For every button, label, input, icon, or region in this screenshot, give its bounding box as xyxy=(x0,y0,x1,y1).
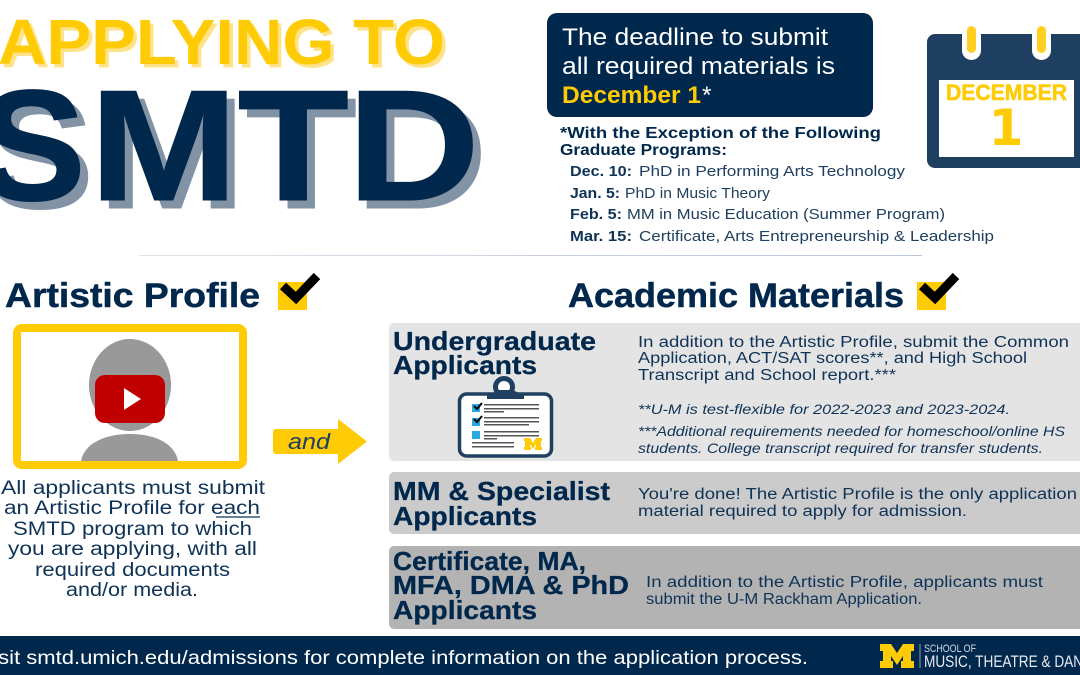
text: undergraduate footnotes: students. College transcript required for transfer students. xyxy=(638,440,1043,456)
panel: certificate, MA, MFA, DMA and PhD applicants xyxy=(389,546,1080,629)
text: MM and specialist requirements xyxy=(638,486,1077,520)
text: MM and specialist requirements: material required to apply for admission. xyxy=(638,503,967,520)
text block: exceptions: Dec. 10: xyxy=(570,163,632,180)
heading: Academic Materials: Academic Materials xyxy=(568,277,904,315)
text block: exceptions: Jan. 5: xyxy=(570,185,620,202)
text block: exceptions: PhD in Music Theory xyxy=(625,185,771,202)
panel: undergraduate applicants: Undergraduate xyxy=(393,326,596,356)
text block: exceptions: Certificate, Arts Entrepreneurship & Leadership xyxy=(639,228,994,245)
text: undergraduate requirements: Transcript and School report.*** xyxy=(638,367,896,384)
text: undergraduate requirements: In addition to the Artistic Profile, submit the Common xyxy=(638,334,1069,351)
footer bar: Visit smtd.umich.edu/admissions for complete information on the application process. xyxy=(0,647,808,669)
text: undergraduate footnotes: **U-M is test-flexible for 2022-2023 and 2023-2024. xyxy=(638,401,1010,417)
text block: artistic profile description: All applicants must submit xyxy=(1,478,266,499)
text block: exceptions: Mar. 15: xyxy=(570,228,632,245)
panel: undergraduate applicants xyxy=(389,323,1080,461)
text: undergraduate requirements xyxy=(638,334,1069,384)
title: Applying to: APPLYING TO xyxy=(2,10,448,82)
text block: artistic profile description: required documents xyxy=(35,560,230,581)
callout: deadline: The deadline to submit xyxy=(562,24,828,51)
title: SMTD: D xyxy=(347,58,480,234)
icon: video frame with portrait and play button xyxy=(17,328,243,465)
panel: certificate, MA, MFA, DMA and PhD applicants: Certificate, MA, xyxy=(393,546,586,576)
icon: academic materials checkbox xyxy=(917,276,956,310)
icon: calendar xyxy=(927,26,1080,168)
panel: MM and specialist applicants: MM & Specialist xyxy=(393,476,610,506)
panel: certificate, MA, MFA, DMA and PhD applicants: Applicants xyxy=(393,595,537,625)
text block: exceptions: *With the Exception of the Following xyxy=(560,125,881,142)
icon: calendar: DECEMBER xyxy=(946,80,1067,105)
text block: artistic profile description: an Artistic Profile for each xyxy=(4,498,260,519)
text: undergraduate footnotes: ***Additional requirements needed for homeschool/online HS xyxy=(638,423,1066,439)
text block: artistic profile description: SMTD program to which xyxy=(13,519,252,540)
heading: Artistic Profile: Artistic Profile xyxy=(5,277,260,315)
text block: exceptions: PhD in Performing Arts Technology xyxy=(639,163,906,180)
arrow: and xyxy=(273,419,367,464)
text block: exceptions: MM in Music Education (Summer Program) xyxy=(627,206,945,223)
text: graduate requirements: In addition to the Artistic Profile, applicants must xyxy=(646,574,1044,591)
text block: artistic profile description: and/or media. xyxy=(66,580,198,601)
arrow: and: and xyxy=(288,429,331,454)
text: graduate requirements xyxy=(646,574,1044,608)
logo text: school name: SCHOOL OF xyxy=(924,643,976,655)
footer bar xyxy=(0,636,1080,675)
logo: block M xyxy=(880,644,914,668)
callout: deadline: * xyxy=(702,82,712,109)
panel: MM and specialist applicants xyxy=(389,472,1080,534)
callout: deadline: December 1 xyxy=(562,82,701,109)
text block: artistic profile description xyxy=(1,478,266,601)
text block: artistic profile description: you are applying, with all xyxy=(8,539,257,560)
icon: calendar: 1 xyxy=(989,99,1023,157)
title: SMTD: T xyxy=(246,66,357,242)
title: SMTD xyxy=(0,58,488,242)
panel: MM and specialist applicants: Applicants xyxy=(393,501,537,531)
icon: clipboard xyxy=(460,378,552,456)
text: graduate requirements: submit the U-M Rackham Application. xyxy=(646,591,922,608)
callout: deadline xyxy=(547,13,873,117)
text block: exceptions: Feb. 5: xyxy=(570,206,622,223)
text: undergraduate requirements: Application, ACT/SAT scores**, and High School xyxy=(638,350,1027,367)
title: SMTD: T xyxy=(238,58,349,234)
panel: certificate, MA, MFA, DMA and PhD applicants: MFA, DMA & PhD xyxy=(393,570,629,600)
title: SMTD: M xyxy=(98,66,246,242)
panel: undergraduate applicants: Applicants xyxy=(393,350,537,380)
logo text: school name xyxy=(924,643,1080,671)
text block: exceptions xyxy=(560,125,994,245)
title: Applying to: APPLYING TO xyxy=(0,6,445,78)
title: SMTD: D xyxy=(355,66,488,242)
icon: artistic profile checkbox xyxy=(278,276,317,310)
title: SMTD: M xyxy=(90,58,238,234)
callout: deadline: all required materials is xyxy=(562,53,835,80)
text block: exceptions: Graduate Programs: xyxy=(560,142,727,159)
text: undergraduate footnotes xyxy=(638,401,1066,456)
text: MM and specialist requirements: You're done! The Artistic Profile is the only application xyxy=(638,486,1077,503)
